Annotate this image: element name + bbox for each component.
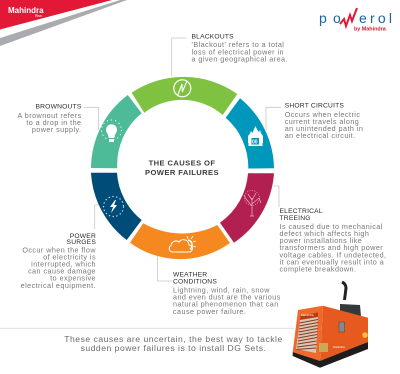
text: electrical treeing: voltage cables. If undetected, bbox=[280, 250, 387, 260]
generator illustration: Mahindra bbox=[301, 313, 314, 317]
segment: brownouts bbox=[91, 95, 142, 168]
text: short circuits: current travels along bbox=[285, 117, 359, 126]
ring chart: six causes bbox=[91, 77, 274, 259]
text: blackouts: 'Blackout' refers to a total bbox=[192, 40, 284, 49]
segment: electrical treeing bbox=[220, 173, 274, 243]
icon: short circuit fire: 00 bbox=[252, 140, 258, 146]
center title: POWER FAILURES bbox=[145, 168, 219, 177]
connector lines bbox=[84, 38, 281, 281]
text: brownouts: BROWNOUTS bbox=[35, 104, 82, 110]
text: electrical treeing: defect which affects high bbox=[280, 229, 369, 238]
segment: short circuits bbox=[226, 98, 274, 168]
text: power surges: SURGES bbox=[67, 239, 96, 246]
text: electrical treeing: TREEING bbox=[280, 215, 311, 222]
segment: weather conditions bbox=[130, 223, 230, 259]
text: short circuits: SHORT CIRCUITS bbox=[285, 102, 344, 110]
text: short circuits: an electrical circuit. bbox=[285, 131, 356, 140]
logo: powerol by Mahindra: by Mahindra bbox=[354, 26, 387, 32]
text: power surges: interrupted, which bbox=[31, 260, 96, 268]
segment: blackouts bbox=[132, 77, 237, 115]
text: power surges: Occur when the flow bbox=[22, 246, 96, 254]
text: blackouts: a given geographical area. bbox=[192, 54, 288, 64]
text: electrical treeing: power installations like bbox=[280, 236, 362, 245]
text: weather conditions: Lightning, wind, rain, snow bbox=[173, 286, 270, 294]
text: power surges: to expensive bbox=[50, 274, 96, 282]
logo: powerol by Mahindra bbox=[319, 8, 395, 32]
text: brownouts bbox=[18, 104, 82, 134]
text: electrical treeing bbox=[280, 208, 387, 274]
text: short circuits: Occurs when electric bbox=[285, 110, 360, 119]
divider bbox=[0, 327, 294, 329]
header banner: Mahindra Rise: Mahindra bbox=[8, 6, 44, 15]
text: electrical treeing: complete breakdown. bbox=[280, 264, 356, 274]
text: blackouts: loss of electrical power in bbox=[192, 48, 284, 56]
segment: power surges bbox=[91, 173, 142, 240]
text: weather conditions: WEATHER bbox=[173, 272, 207, 278]
header banner: Mahindra Rise: Rise. bbox=[35, 14, 43, 18]
text: brownouts: power supply. bbox=[32, 125, 82, 134]
text: electrical treeing: it can eventually result into a bbox=[280, 258, 384, 266]
logo: powerol by Mahindra: p bbox=[319, 10, 327, 26]
text: blackouts bbox=[192, 34, 288, 64]
text: brownouts: A brownout refers bbox=[18, 111, 82, 120]
logo: powerol by Mahindra: erol bbox=[359, 10, 395, 26]
text: weather conditions bbox=[173, 272, 281, 316]
center title bbox=[145, 158, 219, 177]
header banner: Mahindra Rise bbox=[0, 0, 127, 46]
text: short circuits: an unintended path in bbox=[285, 124, 363, 133]
generator illustration bbox=[293, 282, 368, 368]
text: blackouts: BLACKOUTS bbox=[192, 34, 234, 40]
text: weather conditions: and even dust are the various bbox=[173, 292, 281, 302]
text: brownouts: to a drop in the bbox=[26, 118, 82, 127]
generator illustration: Mahindra bbox=[333, 345, 345, 349]
text: weather conditions: natural phenomenon that can bbox=[173, 300, 279, 308]
text: power surges: electrical equipment. bbox=[21, 281, 96, 290]
text: weather conditions: cause power failure. bbox=[173, 307, 246, 316]
text: power surges: can cause damage bbox=[28, 266, 96, 276]
text: electrical treeing: transformers and high power bbox=[280, 243, 383, 252]
footer text bbox=[64, 334, 283, 353]
text: power surges bbox=[21, 233, 96, 290]
icon: blackout bolt circle bbox=[174, 80, 191, 97]
text: electrical treeing: ELECTRICAL bbox=[280, 208, 323, 215]
icon: electrical tree bbox=[244, 190, 261, 216]
logo: powerol by Mahindra: o bbox=[333, 10, 341, 26]
icon: power surge bolt bbox=[104, 196, 124, 216]
icon: weather cloud and sun bbox=[169, 236, 196, 252]
text: power surges: of electricity is bbox=[43, 252, 96, 262]
icon: short circuit fire bbox=[248, 126, 263, 146]
footer text: These causes are uncertain, the best way to tackle bbox=[64, 334, 283, 344]
text: short circuits bbox=[285, 102, 363, 140]
icon: light bulb bbox=[102, 120, 122, 142]
text: weather conditions: CONDITIONS bbox=[173, 278, 217, 286]
footer text: sudden power failures is to install DG Sets. bbox=[81, 343, 266, 353]
text: electrical treeing: Is caused due to mechanical bbox=[280, 222, 383, 231]
center title: THE CAUSES OF bbox=[149, 158, 215, 168]
text: power surges: POWER bbox=[70, 233, 96, 240]
